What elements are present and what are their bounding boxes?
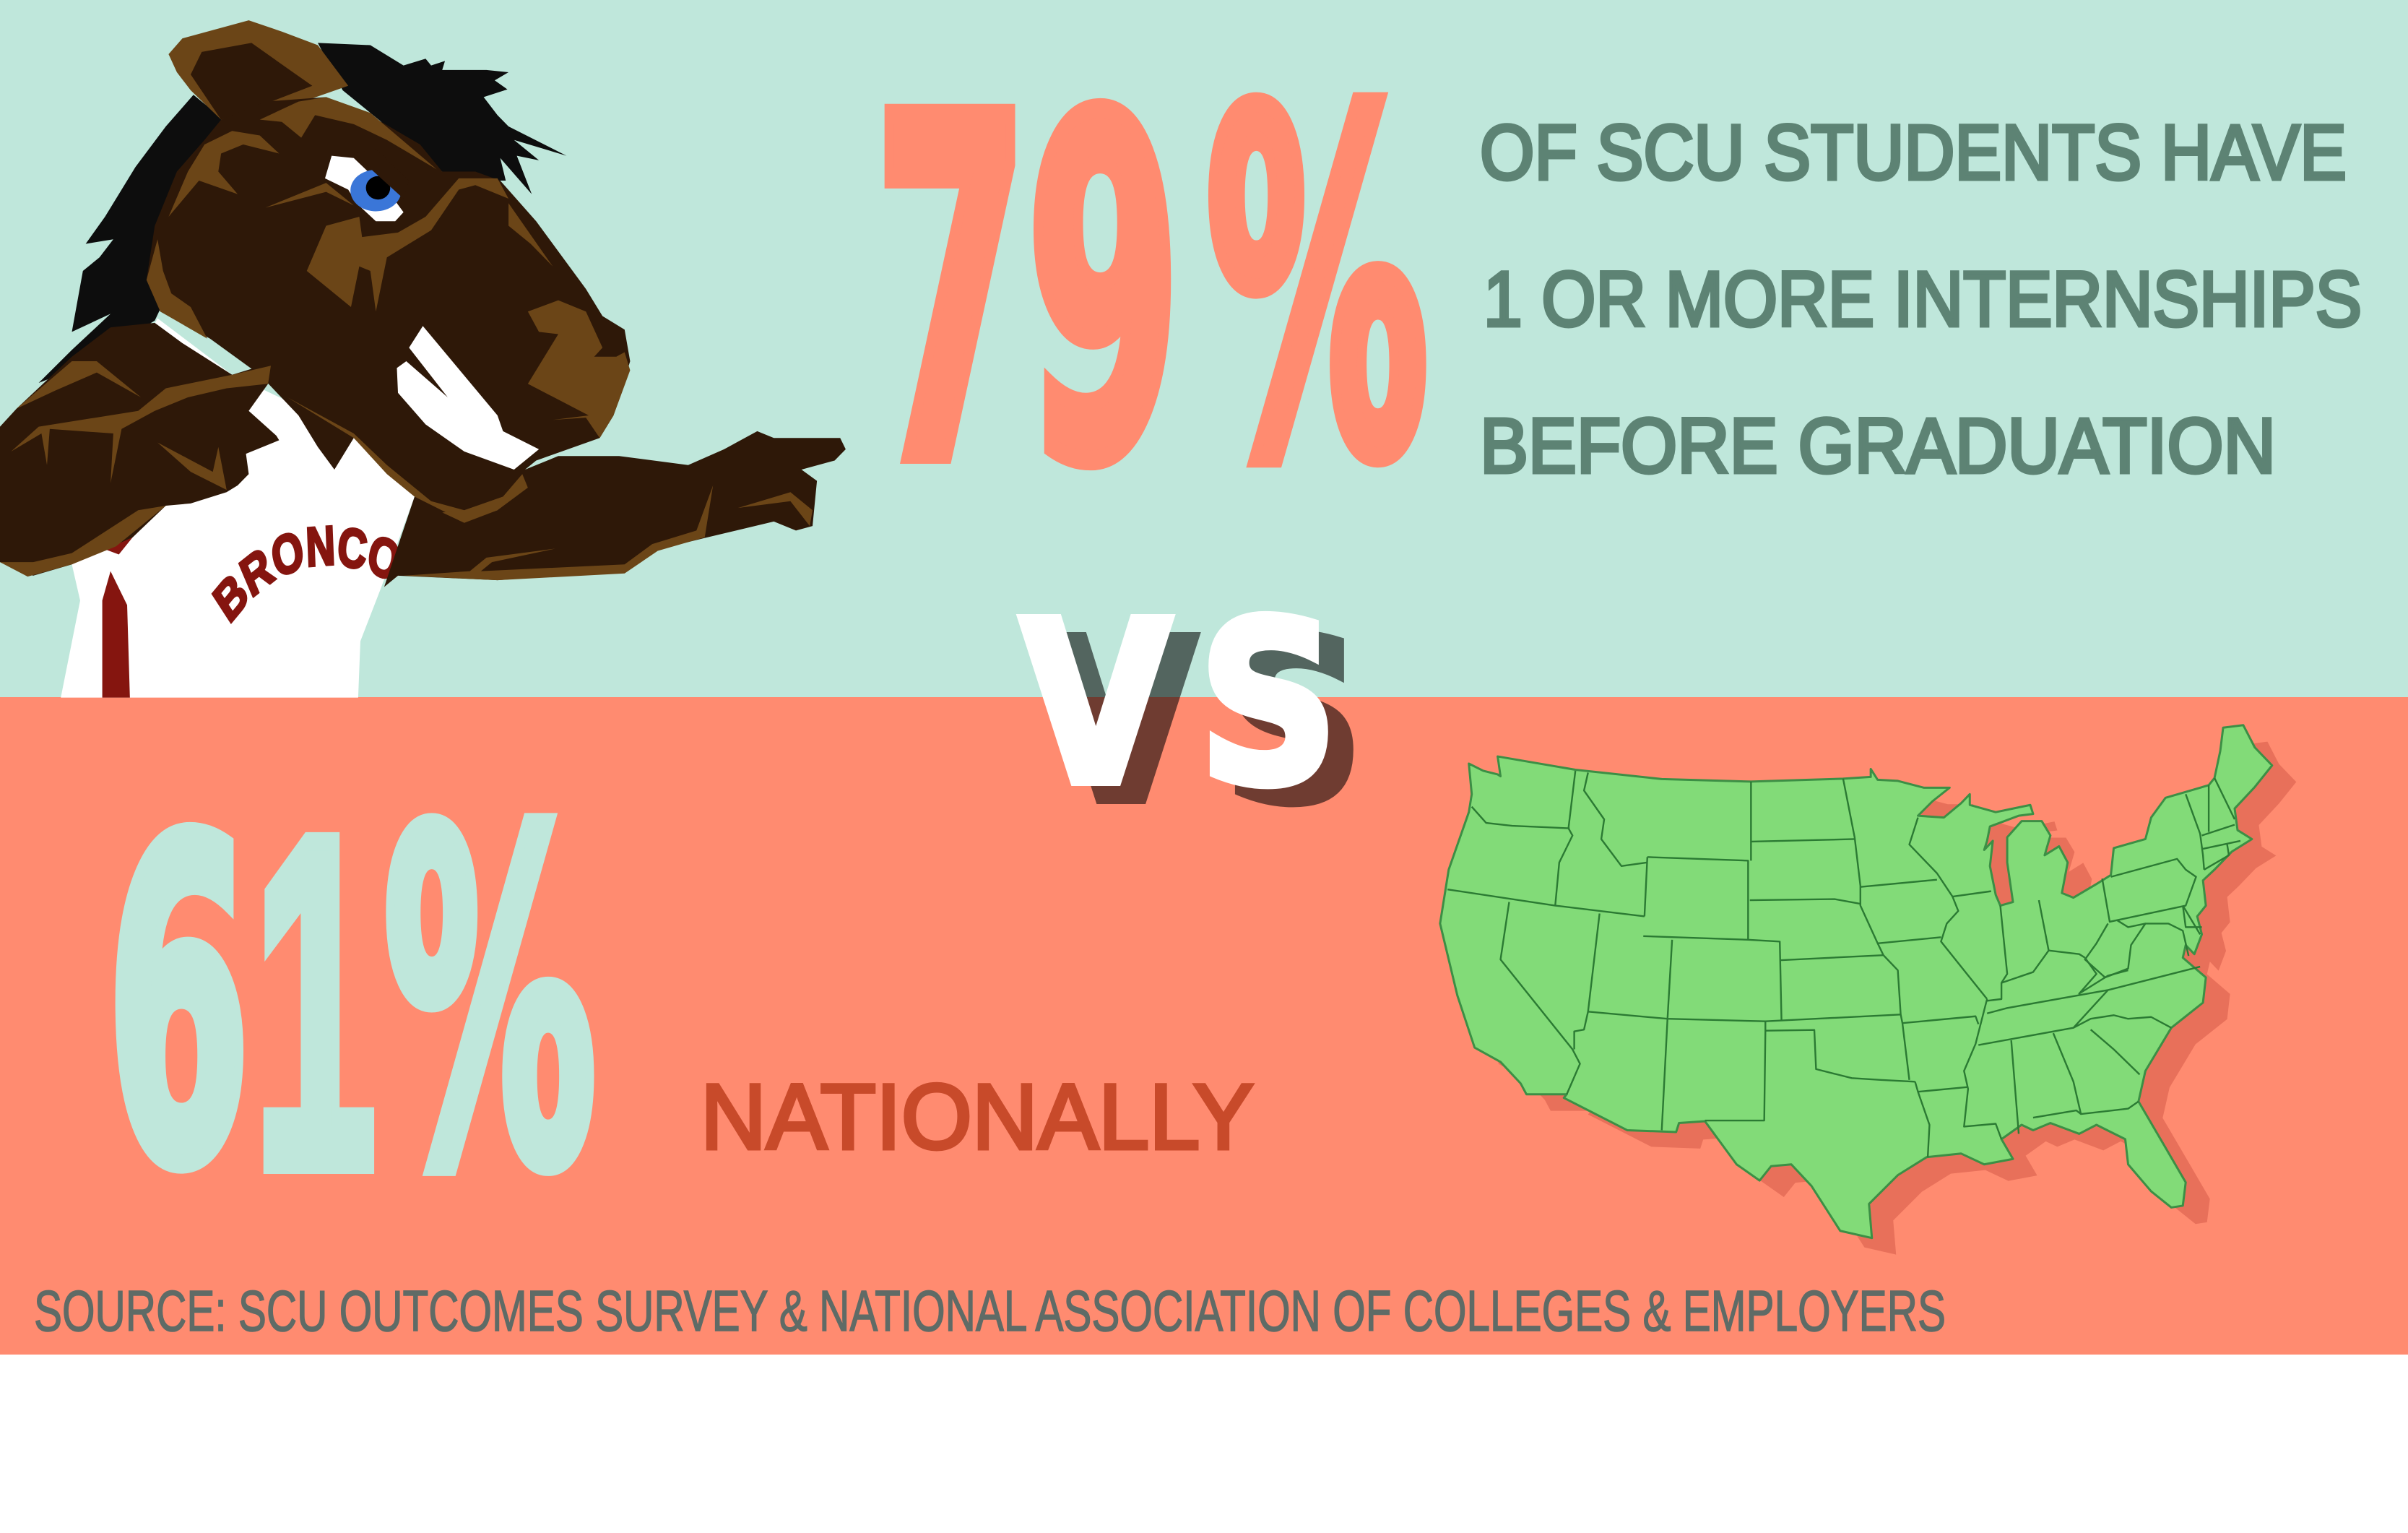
jersey shoulder stripe	[100, 505, 166, 555]
mascot under-eye highlight	[307, 178, 508, 311]
arm lip overlap	[442, 474, 528, 523]
pointing arm highlight	[404, 485, 713, 580]
mascot near arm	[0, 323, 279, 576]
map shadow	[1464, 742, 2296, 1255]
mascot inner ear	[191, 43, 312, 120]
mascot cheek highlight	[168, 131, 279, 217]
panel: national coral bottom section	[0, 697, 2408, 1355]
mascot lower lip	[287, 397, 528, 523]
pointing finger highlight	[738, 492, 813, 526]
VS shadow: VS	[1046, 592, 1364, 853]
panel: SCU mint top section	[0, 0, 2408, 697]
big stat: 61%: %	[384, 738, 597, 1268]
line 3: BEFORE GRADUATION	[1480, 402, 2276, 489]
big stat: 61%	[107, 738, 597, 1268]
mascot teeth	[397, 326, 539, 470]
mascot muzzle highlight	[508, 203, 553, 267]
map land	[1440, 725, 2272, 1238]
VS label: VS	[1021, 574, 1338, 835]
big stat: 61%: 1	[254, 740, 376, 1264]
mascot eye	[325, 149, 409, 221]
mascot brow highlight	[260, 97, 437, 169]
mascot pointing arm	[384, 431, 846, 587]
jersey side stripe	[103, 571, 130, 698]
mascot jersey	[61, 319, 415, 698]
mascot: Bronco horse pointing	[0, 20, 846, 698]
near arm veins	[11, 366, 271, 483]
map state borders	[1447, 771, 2240, 1157]
big stat: 79%: 79	[875, 22, 1180, 563]
jersey lettering: BRONCO	[211, 524, 397, 624]
mascot ear	[168, 20, 348, 120]
mascot mane	[39, 95, 221, 383]
mascot head	[147, 97, 630, 522]
near hand knuckle	[157, 442, 227, 490]
mascot forelock	[318, 43, 566, 194]
mascot eye crease	[265, 183, 354, 208]
label: nationally: NATIONALLY	[701, 1066, 1254, 1169]
big stat: 79%	[875, 15, 1429, 563]
mascot jaw highlight	[147, 239, 207, 339]
mascot nose	[528, 301, 630, 438]
big stat: 79%: %	[1206, 15, 1429, 561]
near arm shoulder	[17, 361, 141, 409]
description: SCU internships	[1480, 108, 2362, 489]
near arm lower edge	[0, 506, 166, 577]
big stat: 61%: 6	[107, 750, 250, 1263]
map: continental USA	[1440, 725, 2296, 1255]
